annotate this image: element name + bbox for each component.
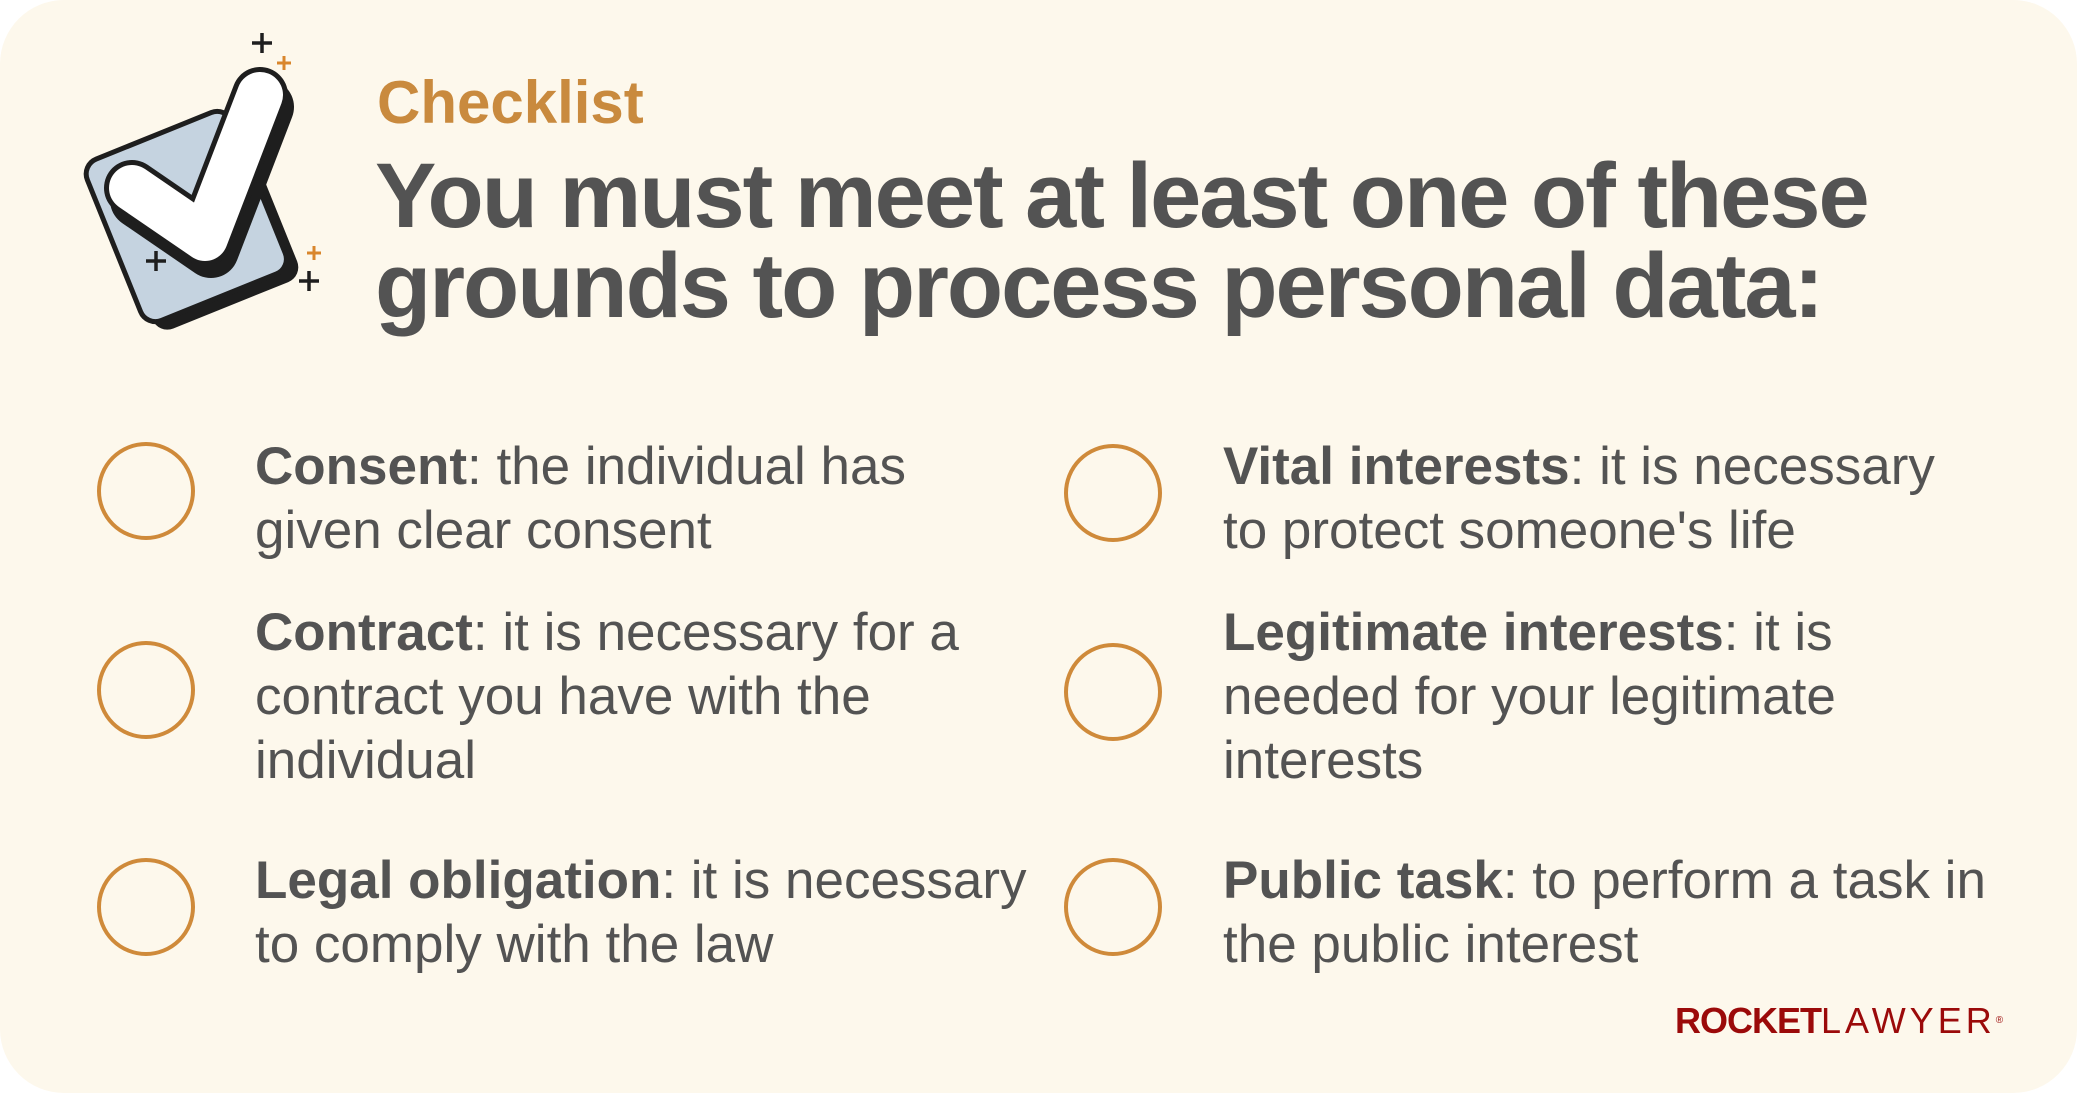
text — [1223, 437, 1935, 560]
circle — [97, 858, 195, 956]
text — [1223, 851, 1986, 974]
item: legal obligation — [97, 851, 1027, 974]
item: public task — [1064, 851, 1986, 974]
text: Public task: to perform a task in — [1223, 851, 1986, 910]
circle — [1064, 444, 1162, 542]
title: You must meet at least one of these — [375, 145, 1868, 247]
item: contract — [97, 603, 959, 790]
logo: Rocket Lawyer: ROCKETLAWYER® — [1675, 1000, 2003, 1041]
text: to comply with the law — [255, 915, 773, 974]
text: Consent: the individual has — [255, 437, 906, 496]
text — [255, 437, 906, 560]
title — [375, 145, 1868, 337]
text: interests — [1223, 731, 1423, 790]
icon: checkbox — [84, 33, 321, 330]
text — [255, 603, 959, 790]
text: to protect someone's life — [1223, 501, 1796, 560]
circle — [1064, 858, 1162, 956]
item: legitimate interests — [1064, 603, 1836, 790]
text: Legitimate interests: it is — [1223, 603, 1833, 662]
circle — [1064, 643, 1162, 741]
item: consent — [97, 437, 906, 560]
circle — [97, 442, 195, 540]
text: individual — [255, 731, 476, 790]
heading: Checklist: Checklist — [377, 69, 644, 136]
text: contract you have with the — [255, 667, 871, 726]
title: grounds to process personal data: — [375, 235, 1822, 337]
item: vital interests — [1064, 437, 1935, 560]
circle — [97, 641, 195, 739]
text: given clear consent — [255, 501, 712, 560]
text: Legal obligation: it is necessary — [255, 851, 1027, 910]
text: Contract: it is necessary for a — [255, 603, 959, 662]
text: the public interest — [1223, 915, 1638, 974]
text: Vital interests: it is necessary — [1223, 437, 1935, 496]
text — [1223, 603, 1836, 790]
text — [255, 851, 1027, 974]
text: needed for your legitimate — [1223, 667, 1836, 726]
